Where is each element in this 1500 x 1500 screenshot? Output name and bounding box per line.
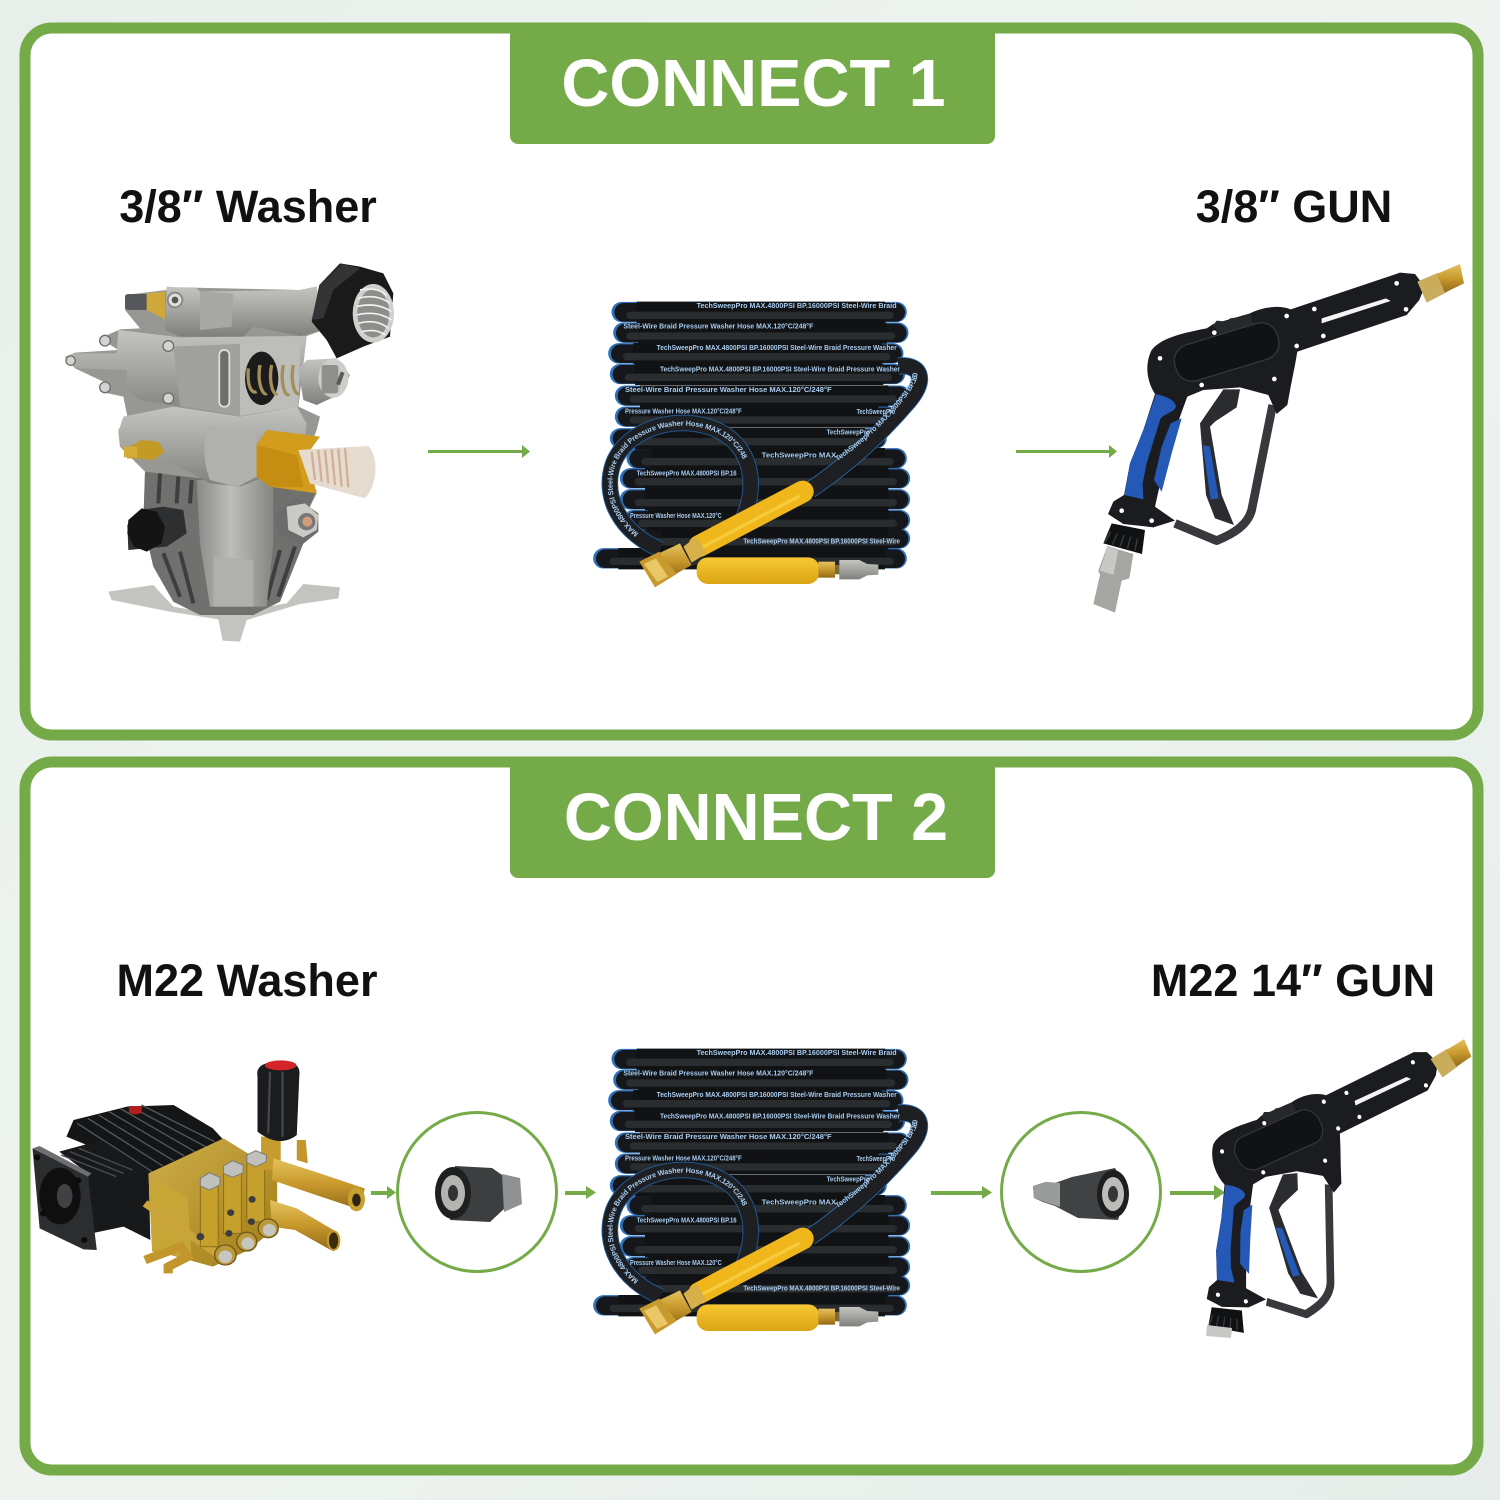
icon: coiled hose with text: TechSweepPro MAX. [762, 450, 838, 459]
icon: coiled hose with text: Pressure Washer Hose MAX.120°C [630, 1258, 722, 1267]
icon: coiled hose with text: TechSweepPro MAX.4800PSI BP.16000PSI Steel-Wire Braid Pressure Washer [660, 364, 900, 373]
label: m22 14 gun: M22 14″ GUN [1151, 955, 1435, 1006]
icon: coiled hose with text: TechSweepPro MAX.4800PSI BP.16000PSI Steel-Wire Braid Pressure Washer [657, 343, 897, 352]
icon: coiled hose with text [593, 301, 928, 588]
icon: coiled hose with text: MAX.4800PSI Steel-Wire Braid Pressure Washer Hose MAX.120°C/248 [607, 420, 747, 537]
icon: coiled hose with text: TechSweepPro MAX.4800PSI BP.16000PSI Steel-Wire Braid Pressure Washer [660, 1111, 900, 1120]
arrow: pump to adapter [371, 1186, 396, 1199]
icon: coiled hose with text: TechSweepPro [857, 407, 895, 416]
icon: coiled hose with text: Pressure Washer Hose MAX.120°C/248°F [625, 406, 742, 415]
icon: coiled hose with text: TechSweepPro MAX.4800PSI BP.16000PSI Steel-Wire [743, 536, 900, 545]
icon: coiled hose with text: TechSweepPro MAX.4800PSI BP.16000PSI Steel-Wire Braid [697, 1048, 897, 1057]
icon: triplex brass pressure pump [32, 1060, 365, 1273]
heading tab: connect 2 [510, 759, 995, 878]
icon: coiled hose with text: Steel-Wire Braid Pressure Washer Hose MAX.120°C/248°F [623, 322, 814, 331]
arrow: adapter to gun [1170, 1185, 1225, 1200]
icon: coiled hose with text: MAX.4800PSI Steel-Wire Braid Pressure Washer Hose MAX.120°C/248 [607, 1168, 747, 1284]
icon: coiled hose with text: TechSweepPro [857, 1154, 895, 1163]
icon: coiled hose with text: Steel-Wire Braid Pressure Washer Hose MAX.120°C/248°F [625, 385, 832, 394]
callout: quick connect to m22 adapter [1002, 1112, 1160, 1272]
panel frame [25, 762, 1478, 1470]
icon: coiled hose with text: TechSweepPro MAX.4800PSI BP.16000PSI Steel-Wire Braid Pressure Washer [657, 1090, 897, 1099]
icon: coiled hose with text: Pressure Washer Hose MAX.120°C [630, 511, 722, 520]
icon: axial pressure washer pump [65, 263, 394, 642]
label: 3/8 washer: 3/8″ Washer [119, 181, 377, 232]
heading tab: connect 2: CONNECT 2 [564, 781, 948, 855]
icon: spray gun with m22 outlet [1155, 1039, 1500, 1338]
icon: coiled hose with text: TechSweepPro [827, 1175, 870, 1184]
icon: spray gun with quick connect plug [1093, 264, 1464, 613]
icon: coiled hose with text: TechSweepPro MAX.4800PSI BP.16000PSI Steel-Wire [743, 1283, 900, 1292]
heading tab: connect 1 [510, 25, 995, 144]
icon: coiled hose with text: Pressure Washer Hose MAX.120°C/248°F [625, 1153, 742, 1162]
panel: connect 1 [20, 22, 1484, 740]
icon: coiled hose with text: Steel-Wire Braid Pressure Washer Hose MAX.120°C/248°F [623, 1069, 814, 1078]
panel frame [25, 28, 1478, 735]
label: m22 washer: M22 Washer [117, 955, 377, 1006]
icon: coiled hose with text: Steel-Wire Braid Pressure Washer Hose MAX.120°C/248°F [625, 1132, 832, 1141]
icon: coiled hose with text: TechSweepPro [827, 428, 870, 437]
label: 3/8 gun: 3/8″ GUN [1196, 181, 1392, 232]
callout: m22 to quick connect adapter [398, 1112, 556, 1272]
icon: coiled hose with text: TechSweepPro MAX. [762, 1197, 838, 1206]
icon: coiled hose with text [593, 1048, 928, 1334]
icon: coiled hose with text: TechSweepPro MAX.4800PSI BP.16000PSI Steel-Wire Braid [697, 301, 897, 310]
icon: coiled hose with text: TechSweepPro MAX.4800PSI BP.16 [637, 1215, 737, 1224]
arrow: hose to adapter [931, 1186, 992, 1199]
icon: coiled hose with text: TechSweepPro MAX.4800PSI BP.16000PSI [834, 1120, 918, 1208]
arrow: adapter to hose [565, 1186, 596, 1199]
arrow: washer to hose [428, 445, 530, 458]
icon: coiled hose with text: TechSweepPro MAX.4800PSI BP.16000PSI [834, 373, 918, 460]
heading tab: connect 1: CONNECT 1 [561, 47, 946, 121]
arrow: hose to gun [1016, 445, 1117, 458]
icon: coiled hose with text: TechSweepPro MAX.4800PSI BP.16 [637, 468, 737, 477]
panel: connect 2 [20, 756, 1484, 1476]
